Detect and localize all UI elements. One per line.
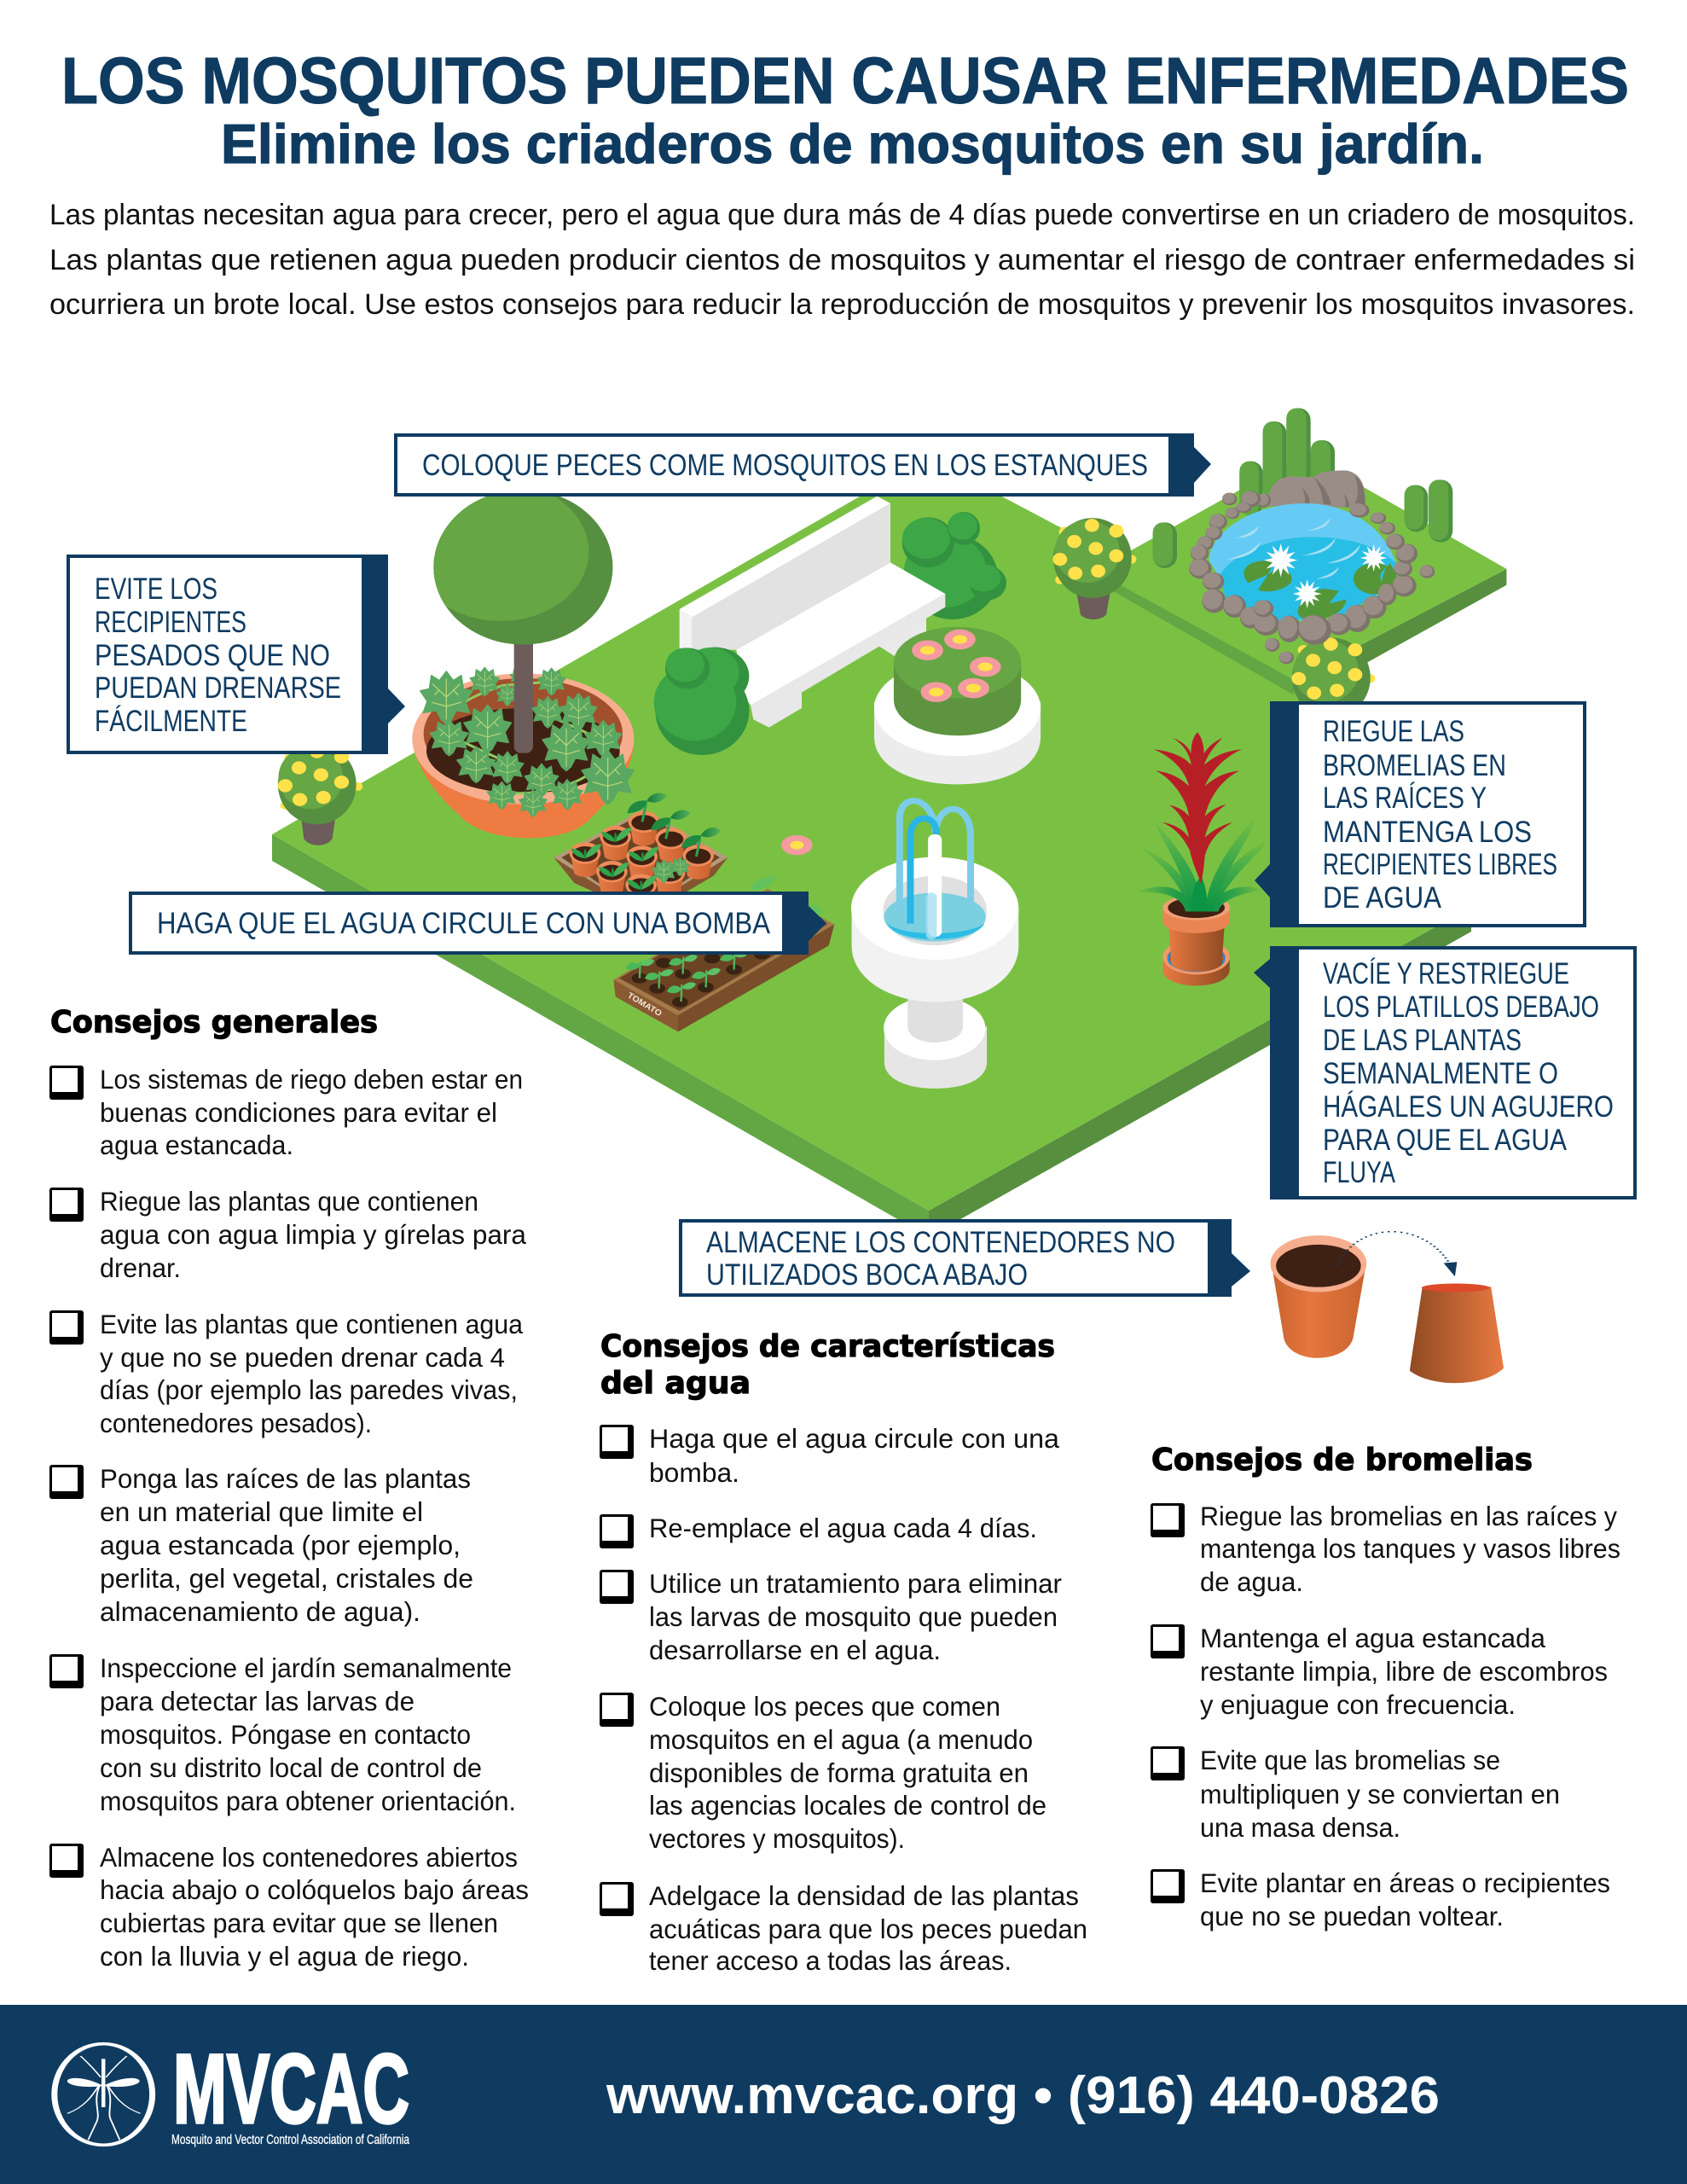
tip 2: agua con agua limpia y gírelas para: [100, 1219, 526, 1250]
tip 5: acuáticas para que los peces puedan: [649, 1914, 1087, 1944]
tip 1: Haga que el agua circule con una: [649, 1423, 1059, 1454]
fountain base: [884, 995, 987, 1089]
tip 1: [600, 1423, 1059, 1488]
pond lawn platform: [1115, 454, 1506, 704]
callout: platillos: HÁGALES UN AGUJERO: [1323, 1090, 1614, 1124]
tip 3: días (por ejemplo las paredes vivas,: [100, 1374, 518, 1405]
big bowl pot: [412, 673, 634, 838]
callout: platillos: DE LAS PLANTAS: [1323, 1024, 1522, 1057]
tip 2: Mantenga el agua estancada: [1200, 1623, 1545, 1653]
lily pads and flowers: [1244, 543, 1397, 620]
lawn divider and right yellow bush: [1110, 582, 1375, 717]
tip 4: disponibles de forma gratuita en: [649, 1757, 1029, 1788]
pond water: [1209, 503, 1396, 621]
intro paragraph: Las plantas que retienen agua pueden producir cientos de mosquitos y aumentar el riesgo de contraer enfermedades si: [49, 244, 1635, 276]
pink flower: [781, 835, 813, 855]
callout: bromelias: DE AGUA: [1323, 881, 1442, 915]
callout: platillos: SEMANALMENTE O: [1323, 1057, 1558, 1090]
website and phone: www.mvcac.org • (916) 440-0826: [606, 2066, 1440, 2125]
tip 3: Evite que las bromelias se: [1200, 1745, 1500, 1775]
callout: bromelias: MANTENGA LOS: [1323, 816, 1532, 849]
tip 5: para detectar las larvas de: [100, 1686, 415, 1716]
tip 5: [600, 1880, 1087, 1976]
tip 3: desarrollarse en el agua.: [649, 1635, 941, 1665]
upright pot: [1271, 1235, 1366, 1358]
tip 4: mosquitos en el agua (a menudo: [649, 1724, 1033, 1755]
red flower spike: [1154, 732, 1242, 885]
bromeliad in pot: [1134, 732, 1270, 985]
callout: bomba: [130, 892, 826, 955]
tip 1: Riegue las bromelias en las raíces y: [1200, 1501, 1617, 1531]
seedling trays: [554, 793, 834, 1031]
yellow flower bush right: [1291, 637, 1375, 717]
tip 4: almacenamiento de agua).: [100, 1596, 420, 1627]
bench and green bushes: [654, 497, 1006, 755]
tip 4: vectores y mosquitos).: [649, 1823, 905, 1854]
heading: consejos generales: Consejos generales: [50, 1005, 378, 1040]
bench: [680, 497, 945, 728]
tip 3: [1151, 1745, 1560, 1843]
tip 4: Coloque los peces que comen: [649, 1691, 1000, 1722]
tip 6: cubiertas para evitar que se llenen: [100, 1908, 498, 1938]
callout: platillos: [1254, 946, 1635, 1199]
ivy front leaves: [420, 671, 634, 816]
footer band: [0, 2005, 1687, 2184]
heading: caracteristicas del agua: [600, 1329, 1055, 1401]
callout: platillos: FLUYA: [1323, 1156, 1396, 1189]
tree trunk: [514, 597, 533, 753]
heading: caracteristicas del agua: Consejos de características: [600, 1329, 1055, 1364]
tip 2: restante limpia, libre de escombros: [1200, 1656, 1608, 1687]
tip 3: [600, 1568, 1062, 1665]
tip 1: de agua.: [1200, 1566, 1303, 1597]
boulders: [1267, 470, 1365, 508]
main lawn: [272, 457, 1471, 1237]
tip 5: Inspeccione el jardín semanalmente: [100, 1653, 512, 1683]
logo wordmark: MVCAC: [173, 2035, 409, 2144]
fountain basin and water: [851, 801, 1018, 1002]
callout: contenedores: ALMACENE LOS CONTENEDORES NO: [706, 1226, 1175, 1259]
tip 1: mantenga los tanques y vasos libres: [1200, 1533, 1620, 1564]
callout: contenedores: [681, 1219, 1250, 1297]
tip 6: con la lluvia y el agua de riego.: [100, 1941, 469, 1972]
ivy back leaves: [470, 667, 565, 706]
garden illustration: [272, 408, 1506, 1383]
terracotta pot: [1162, 895, 1230, 972]
pond rocks: [1189, 491, 1435, 664]
flower pots pair with dotted arrow: [1271, 1232, 1504, 1383]
callout: platillos: PARA QUE EL AGUA: [1323, 1124, 1568, 1157]
callout: platillos: VACÍE Y RESTRIEGUE: [1323, 957, 1569, 990]
tip 1: bomba.: [649, 1457, 739, 1488]
seedling pots tray: [554, 793, 728, 909]
tomato seedling box: [613, 876, 834, 1031]
tree crown: [433, 497, 612, 645]
tip 2: Riegue las plantas que contienen: [100, 1186, 478, 1217]
intro paragraph: Las plantas necesitan agua para crecer, pero el agua que dura más de 4 días puede convertirse en un criadero de mosquitos.: [49, 199, 1635, 231]
tip 1: buenas condiciones para evitar el: [100, 1097, 497, 1128]
saucer: [1162, 939, 1230, 985]
tip 2: drenar.: [100, 1252, 181, 1283]
logo wordmark: [171, 2035, 409, 2147]
dotted arrow: [1337, 1232, 1457, 1276]
ivy vines: [450, 681, 603, 793]
callout: recipientes pesados: PESADOS QUE NO: [95, 639, 330, 672]
tip 2: [1151, 1623, 1608, 1720]
callout: bomba: HAGA QUE EL AGUA CIRCULE CON UNA BOMBA: [157, 907, 771, 940]
tip 3: una masa densa.: [1200, 1812, 1400, 1843]
tip 4: agua estancada (por ejemplo,: [100, 1530, 461, 1560]
callout: recipientes pesados: PUEDAN DRENARSE: [95, 671, 341, 705]
tip 2: [49, 1186, 526, 1283]
callout: contenedores: UTILIZADOS BOCA ABAJO: [706, 1258, 1028, 1292]
tip 4: perlita, gel vegetal, cristales de: [100, 1563, 473, 1594]
tip 1: [1151, 1501, 1620, 1597]
tip 5: [49, 1653, 516, 1816]
tip 4: Evite plantar en áreas o recipientes: [1200, 1867, 1610, 1898]
tip 4: las agencias locales de control de: [649, 1790, 1046, 1821]
tip 3: las larvas de mosquito que pueden: [649, 1601, 1058, 1632]
tip 3: y que no se pueden drenar cada 4: [100, 1342, 505, 1373]
tip 1: Los sistemas de riego deben estar en: [100, 1064, 523, 1095]
callout: bromelias: LAS RAÍCES Y: [1323, 781, 1487, 815]
subtitle: Elimine los criaderos de mosquitos en su jardín.: [221, 113, 1484, 175]
logo wordmark: Mosquito and Vector Control Association of California: [171, 2133, 409, 2147]
tip 3: contenedores pesados).: [100, 1408, 372, 1438]
intro paragraph: ocurriera un brote local. Use estos consejos para reducir la reproducción de mosquitos y prevenir los mosquitos invasores.: [49, 288, 1635, 321]
tip 2: Re-emplace el agua cada 4 días.: [649, 1513, 1037, 1543]
tip 4: en un material que limite el: [100, 1496, 423, 1527]
callout: bromelias: RECIPIENTES LIBRES: [1323, 848, 1557, 881]
tip 4: que no se puedan voltear.: [1200, 1901, 1504, 1931]
callout: recipientes pesados: [68, 555, 405, 754]
tip 1: [49, 1064, 523, 1160]
green fronds: [1134, 816, 1270, 911]
tip 5: mosquitos. Póngase en contacto: [100, 1719, 471, 1750]
callout: bromelias: BROMELIAS EN: [1323, 749, 1506, 782]
top yellow flower bush: [1052, 518, 1136, 619]
tip 5: con su distrito local de control de: [100, 1752, 482, 1783]
tip 6: [49, 1842, 529, 1972]
tip 4: [600, 1691, 1046, 1854]
tip 4: [49, 1463, 473, 1627]
heading: caracteristicas del agua: del agua: [600, 1366, 751, 1401]
green bush upper: [902, 512, 1006, 619]
cacti: [1153, 408, 1452, 568]
upside down pot: [1410, 1284, 1504, 1383]
callout: bromelias: [1255, 701, 1585, 927]
callout: peces: COLOQUE PECES COME MOSQUITOS EN LOS ESTANQUES: [422, 449, 1148, 482]
small yellow flower bush left: [278, 744, 362, 845]
green bush by bench: [654, 648, 749, 755]
tomato seedling box: TOMATO: [625, 990, 664, 1019]
panel: consejos de caracteristicas del agua: [600, 1329, 1087, 1976]
tip 6: hacia abajo o colóquelos bajo áreas: [100, 1874, 529, 1905]
callout: platillos: LOS PLATILLOS DEBAJO: [1323, 990, 1599, 1024]
heading: bromelias: Consejos de bromelias: [1151, 1443, 1533, 1478]
tip 5: tener acceso a todas las áreas.: [649, 1945, 1012, 1976]
intro paragraph: [49, 199, 1635, 321]
tip 3: multipliquen y se conviertan en: [1200, 1779, 1560, 1809]
bowl pot with ivy: [412, 597, 634, 838]
icon: mvcac mosquito logo: [55, 2044, 153, 2145]
tip 4: [1151, 1867, 1610, 1931]
callout: peces: [396, 433, 1211, 497]
callout: bromelias: RIEGUE LAS: [1323, 715, 1464, 748]
tip 3: Evite las plantas que contienen agua: [100, 1309, 523, 1339]
tip 6: Almacene los contenedores abiertos: [100, 1842, 518, 1873]
panel: consejos de bromelias: [1151, 1443, 1620, 1931]
tip 4: Ponga las raíces de las plantas: [100, 1463, 471, 1494]
tip 5: mosquitos para obtener orientación.: [100, 1786, 516, 1816]
flower bed on pedestal: [874, 627, 1041, 784]
tip 3: Utilice un tratamiento para eliminar: [649, 1568, 1062, 1599]
panel: consejos generales: [49, 1005, 529, 1972]
pond area: [1153, 408, 1452, 664]
tip 5: Adelgace la densidad de las plantas: [649, 1880, 1079, 1911]
callout: recipientes pesados: RECIPIENTES: [95, 606, 246, 639]
callout: recipientes pesados: FÁCILMENTE: [95, 705, 247, 738]
tip 2: y enjuague con frecuencia.: [1200, 1689, 1516, 1720]
tip 1: agua estancada.: [100, 1130, 293, 1160]
tip 3: [49, 1309, 523, 1438]
callout: recipientes pesados: EVITE LOS: [95, 572, 217, 606]
lawn divider strip: [1110, 582, 1294, 695]
